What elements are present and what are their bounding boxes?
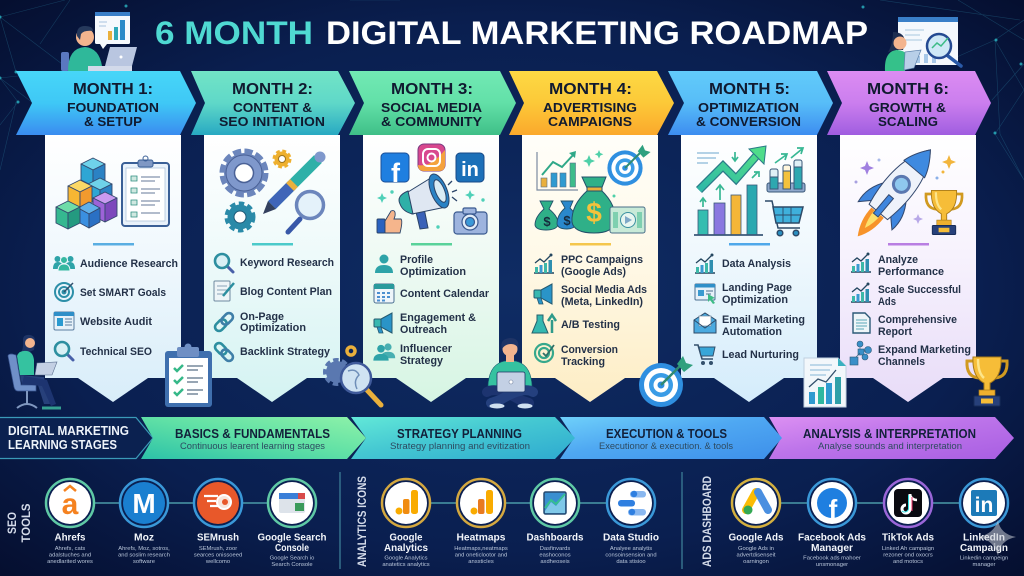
list item: PPC Campaigns: PPC Campaigns <box>561 254 643 266</box>
month 2 banner <box>191 71 355 135</box>
tool: Facebook Ads Manager: Facebook Ads <box>798 532 866 544</box>
tool: Google Analytics: Analytics <box>384 542 428 554</box>
tool: Dashboards <box>526 479 584 565</box>
icon: target <box>607 145 651 186</box>
tool: Google Ads: Google Ads in <box>738 546 774 552</box>
list item: Lead Nurturing: Lead Nurturing <box>722 349 799 361</box>
stage: strategy planning: STRATEGY PLANNING <box>397 427 522 441</box>
icon: large money bag <box>572 177 615 233</box>
tool: Google Analytics <box>382 479 430 568</box>
tool: LinkedIn Campaign: Campaign <box>960 542 1008 554</box>
list item: Landing Page Optimization <box>695 282 792 306</box>
label: SEO tools: SEO <box>7 512 19 534</box>
icon: trophy <box>926 190 962 234</box>
list item: Scale Successful Ads: Ads <box>878 296 896 308</box>
icon: small orange gear <box>274 152 290 166</box>
tool: Ahrefs <box>46 479 94 565</box>
illustration: report document <box>804 358 846 407</box>
watermark sparkle <box>978 520 1016 556</box>
tool: Moz: Moz <box>134 532 154 544</box>
icon: sparkles <box>583 150 616 198</box>
tool: Dashboards: Dasfinvards <box>540 546 570 552</box>
list item: Conversion Tracking <box>535 344 618 368</box>
list item: Engagement & Outreach <box>374 312 476 336</box>
tool: TikTok Ads: Linked Ah campaign <box>882 546 934 552</box>
month 2 banner: MONTH 2: <box>232 81 313 98</box>
icon: large gear <box>224 153 264 193</box>
tool: TikTok Ads: TikTok Ads <box>882 532 934 544</box>
icon: blue money bag <box>557 201 577 229</box>
stage: strategy planning <box>351 417 575 459</box>
list item: Set SMART Goals: Set SMART Goals <box>80 287 166 299</box>
list item: Influencer Strategy <box>373 343 453 367</box>
illustration: gears and magnifier <box>326 347 381 405</box>
month 1 banner: MONTH 1: <box>73 81 153 98</box>
list item: Analyze Performance <box>851 252 944 278</box>
tool: TikTok Ads <box>882 479 934 565</box>
icon: small money bag <box>535 201 558 230</box>
month 1 banner <box>16 71 196 135</box>
icon: Facebook <box>381 153 409 188</box>
list item: Social Media Ads: (Meta, LinkedIn) <box>561 296 643 308</box>
panel: month 5 card <box>681 135 817 402</box>
icon: sparkles <box>854 155 956 224</box>
tool: Data Studio <box>603 479 659 565</box>
month 4 banner: MONTH 4: <box>549 81 632 98</box>
list item: On-Page Optimization: Optimization <box>240 322 306 334</box>
list item: PPC Campaigns <box>534 254 643 278</box>
panel: month 4 card <box>522 135 658 402</box>
list item: Keyword Research <box>215 254 334 272</box>
tool: Data Studio: Analyee analytis <box>610 546 652 552</box>
month 3 banner <box>349 71 516 135</box>
tool: Google Ads: advertdisenseit <box>736 552 776 558</box>
icon: megaphone <box>399 171 457 229</box>
illustration: woman with analytics board <box>885 17 961 71</box>
list item: Profile Optimization: Profile <box>400 254 433 266</box>
list item: Conversion Tracking: Conversion <box>561 344 618 356</box>
tool: Heatmaps <box>454 479 508 565</box>
icon: large money bag: $ <box>586 197 602 228</box>
list item: Engagement & Outreach: Engagement & <box>400 312 476 324</box>
tool: Moz: M <box>132 488 156 519</box>
icon: test tubes <box>767 160 805 192</box>
icon: shopping cart <box>765 201 803 236</box>
tool: Data Studio: Data Studio <box>603 532 659 544</box>
list item: Set SMART Goals <box>55 283 166 301</box>
tool: LinkedIn Campaign: in <box>975 494 993 517</box>
list item: Website Audit <box>54 312 152 330</box>
stage: analysis and interpretation: ANALYSIS & INTERPRETATION <box>803 427 976 441</box>
list item: Lead Nurturing <box>694 345 799 365</box>
tool: Dashboards: Dashboards <box>526 532 584 544</box>
tool: Moz: software <box>133 559 155 565</box>
tool: Facebook Ads Manager: f <box>829 494 838 524</box>
tool: SEMrush: SEMrush, zoor <box>199 546 237 552</box>
panel: month 6 card <box>840 135 976 402</box>
icon: blue money bag: $ <box>563 213 571 228</box>
illustration: target with arrow <box>639 356 693 407</box>
tool: Google Analytics: Google <box>390 532 423 544</box>
title: DIGITAL MARKETING ROADMAP <box>326 15 868 51</box>
list item: A/B Testing <box>532 315 620 333</box>
icon: pen <box>263 152 326 214</box>
month 5 banner: MONTH 5: <box>709 81 790 98</box>
title: 6 MONTH <box>155 15 313 51</box>
illustration: man sitting cross-legged with laptop <box>487 338 533 408</box>
list item: Comprehensive Report: Report <box>878 326 912 338</box>
list item: Data Analysis: Data Analysis <box>722 258 791 270</box>
tool: Heatmaps: Heatmaps,neatmaps <box>454 546 508 552</box>
icon: bar chart <box>694 185 763 235</box>
list item: Social Media Ads: Social Media Ads <box>561 284 647 296</box>
icon: cubes <box>56 158 117 229</box>
tool: Dashboards: eashoconos <box>539 552 571 558</box>
month 3 banner: SOCIAL MEDIA <box>381 100 483 115</box>
illustration: gold trophy <box>967 357 1007 406</box>
list item: Keyword Research: Keyword Research <box>240 257 334 269</box>
tool: LinkedIn Campaign: manager <box>973 562 996 568</box>
icon: banknote with play <box>610 207 645 233</box>
tool: Google Search Console: Console <box>275 542 309 554</box>
list item: Scale Successful Ads: Scale Successful <box>878 284 961 296</box>
list item: Email Marketing Automation <box>694 313 805 338</box>
stage: execution and tools: Executionor & execution. & tools <box>599 441 734 451</box>
list item: Expand Marketing Channels: Expand Marketing <box>878 344 971 356</box>
illustration: checklist clipboard <box>165 344 212 407</box>
list item: Blog Content Plan <box>214 281 332 301</box>
tool: Ahrefs: Ahrefs, cats <box>55 546 85 552</box>
month 5 banner <box>668 71 833 135</box>
list item: A/B Testing: A/B Testing <box>561 319 620 331</box>
list item: Email Marketing Automation: Email Marketing <box>722 314 805 326</box>
stage: basics and fundamentals: BASICS & FUNDAMENTALS <box>175 427 330 441</box>
label: analytics icons: ANALYTICS ICONS <box>357 476 369 567</box>
list item: Influencer Strategy: Influencer <box>400 343 453 355</box>
tool: Heatmaps: anssticles <box>468 559 494 565</box>
month 4 banner <box>509 71 674 135</box>
stages: label: DIGITAL MARKETING <box>8 424 129 438</box>
stage: analysis and interpretation: Analyse sounds and interpretation <box>818 441 962 451</box>
tool: Ahrefs: a <box>62 488 79 521</box>
label: SEO tools <box>7 503 33 542</box>
icon: thumbs up <box>377 211 402 233</box>
list item: Social Media Ads <box>534 284 647 308</box>
illustration: seated woman with laptop <box>8 335 61 408</box>
list item: Comprehensive Report <box>853 313 957 338</box>
tool: Heatmaps: and oneticlootor and <box>455 552 507 558</box>
stage: basics and fundamentals <box>141 417 366 459</box>
stage: execution and tools <box>560 417 782 459</box>
tool: Google Search Console: Google Search <box>258 532 326 544</box>
list item: Content Calendar <box>374 284 490 303</box>
list item: Technical SEO: Technical SEO <box>80 346 152 358</box>
tool: Facebook Ads Manager <box>798 479 866 568</box>
list item: Blog Content Plan: Blog Content Plan <box>240 286 332 298</box>
tool: Moz: Ahrefs, Moz, sotros, <box>118 546 170 552</box>
list item: PPC Campaigns: (Google Ads) <box>561 266 626 278</box>
tool: SEMrush <box>194 479 242 565</box>
list item: Audience Research <box>53 256 178 271</box>
tool: SEMrush: SEMrush <box>197 532 239 544</box>
stage: execution and tools: EXECUTION & TOOLS <box>606 427 727 441</box>
tool: Google Search Console: Google Search io <box>270 556 314 562</box>
list item: Backlink Strategy: Backlink Strategy <box>240 346 331 358</box>
panel: month 2 card <box>204 135 340 402</box>
list item: Technical SEO <box>55 342 152 360</box>
tool: Dashboards: axdheoseis <box>540 559 570 565</box>
tool: TikTok Ads: rezoner ond oxocrs <box>883 552 933 558</box>
tool: Facebook Ads Manager: Facebook ads mahoer <box>803 556 861 562</box>
tool: LinkedIn Campaign: Linkedin campeign <box>960 556 1008 562</box>
list item: Data Analysis <box>695 254 791 273</box>
icon: LinkedIn: in <box>461 159 479 181</box>
list item: Website Audit: Website Audit <box>80 316 152 328</box>
icon: small growth arrows <box>700 148 803 207</box>
month 3 banner: MONTH 3: <box>391 81 473 98</box>
list item: Analyze Performance: Performance <box>878 266 944 278</box>
list item: Expand Marketing Channels <box>850 341 971 368</box>
month 1 banner: FOUNDATION <box>67 100 159 115</box>
month 3 banner: & COMMUNITY <box>381 114 482 129</box>
icon: camera <box>454 208 487 234</box>
tool: Data Studio: consoinsension and <box>605 552 657 558</box>
tool: Google Ads: oarningon <box>743 559 769 565</box>
tool: Ahrefs: anedlarited wores <box>47 559 93 565</box>
list item: Profile Optimization <box>375 254 466 278</box>
icon: sparkles <box>377 190 485 229</box>
tool: Ahrefs: Ahrefs <box>54 532 86 544</box>
stage: basics and fundamentals: Continuous learent learning stages <box>180 441 326 451</box>
month 2 banner: CONTENT & <box>233 100 312 115</box>
tool: TikTok Ads: and motocs <box>893 559 923 565</box>
stage: analysis and interpretation <box>769 417 1014 459</box>
icon: growth chart <box>537 151 578 190</box>
list item: On-Page Optimization <box>213 311 306 334</box>
list item: Engagement & Outreach: Outreach <box>400 324 447 336</box>
icon: teal gear <box>228 204 252 230</box>
tool: Google Ads <box>728 479 784 565</box>
tool: Ahrefs: adalstuches and <box>49 552 91 558</box>
tool: Google Search Console <box>258 479 326 568</box>
list item: Analyze Performance: Analyze <box>878 254 918 266</box>
month 2 banner: SEO INITIATION <box>219 114 325 129</box>
list item: Audience Research: Audience Research <box>80 258 178 270</box>
list item: Backlink Strategy <box>213 341 331 363</box>
tool: Facebook Ads Manager: unsmonager <box>816 562 848 568</box>
icon: LinkedIn <box>456 153 484 182</box>
tool: LinkedIn Campaign: LinkedIn <box>963 532 1005 544</box>
list item: Influencer Strategy: Strategy <box>400 355 444 367</box>
list item: Landing Page Optimization: Optimization <box>722 294 788 306</box>
illustration: man at laptop with chart bubble <box>61 12 137 71</box>
icon: rocket <box>840 135 948 251</box>
month 4 banner: ADVERTISING <box>543 100 637 115</box>
tool: Google Ads: Google Ads <box>728 532 784 544</box>
tool: LinkedIn Campaign <box>960 479 1008 568</box>
tool: SEMrush: searces onissoeed <box>194 552 242 558</box>
tool: Google Analytics: Google Analytics <box>384 556 428 562</box>
list item: Scale Successful Ads <box>851 282 961 308</box>
list item: Expand Marketing Channels: Channels <box>878 356 925 368</box>
tool: Moz <box>118 479 170 565</box>
icon: checklist clipboard <box>122 156 169 226</box>
tool: Moz: and soslim research <box>118 552 170 558</box>
panel: month 1 card <box>45 135 181 402</box>
stages: label: LEARNING STAGES <box>8 438 117 452</box>
label: ads dashboard: ADS DASHBOARD <box>702 476 714 567</box>
tool: Google Analytics: anatetics analytics <box>382 562 430 568</box>
list item: Conversion Tracking: Tracking <box>561 356 605 368</box>
month 5 banner: OPTIMIZATION <box>698 100 799 115</box>
icon: magnifier <box>288 192 324 232</box>
list item: Email Marketing Automation: Automation <box>722 326 782 338</box>
icon: Facebook: f <box>391 158 401 188</box>
icon: rising arrow <box>697 146 766 190</box>
month 5 banner: & CONVERSION <box>696 114 801 129</box>
list item: Content Calendar: Content Calendar <box>400 288 490 300</box>
icon: small money bag: $ <box>543 214 551 229</box>
list item: Profile Optimization: Optimization <box>400 266 466 278</box>
tool: Facebook Ads Manager: Manager <box>811 542 853 554</box>
label: SEO tools: TOOLS <box>21 503 33 542</box>
tool: Heatmaps: Heatmaps <box>456 532 506 544</box>
month 6 banner: MONTH 6: <box>867 81 949 98</box>
month 6 banner <box>827 71 991 135</box>
stages: label <box>0 418 153 458</box>
tool: SEMrush: wellcomo <box>205 559 230 565</box>
icon: Instagram <box>418 144 445 171</box>
tool: Google Search Console: Search Console <box>271 562 313 568</box>
month 1 banner: & SETUP <box>84 114 142 129</box>
list item: On-Page Optimization: On-Page <box>240 311 284 323</box>
panel: month 3 card <box>363 135 499 402</box>
list item: Comprehensive Report: Comprehensive <box>878 314 957 326</box>
month 6 banner: GROWTH & <box>869 100 946 115</box>
list item: Landing Page Optimization: Landing Page <box>722 282 792 294</box>
stage: strategy planning: Strategy planning and evitization <box>390 441 530 451</box>
tool: Data Studio: data stisioo <box>616 559 646 565</box>
month 4 banner: CAMPAIGNS <box>548 114 632 129</box>
month 6 banner: SCALING <box>878 114 938 129</box>
